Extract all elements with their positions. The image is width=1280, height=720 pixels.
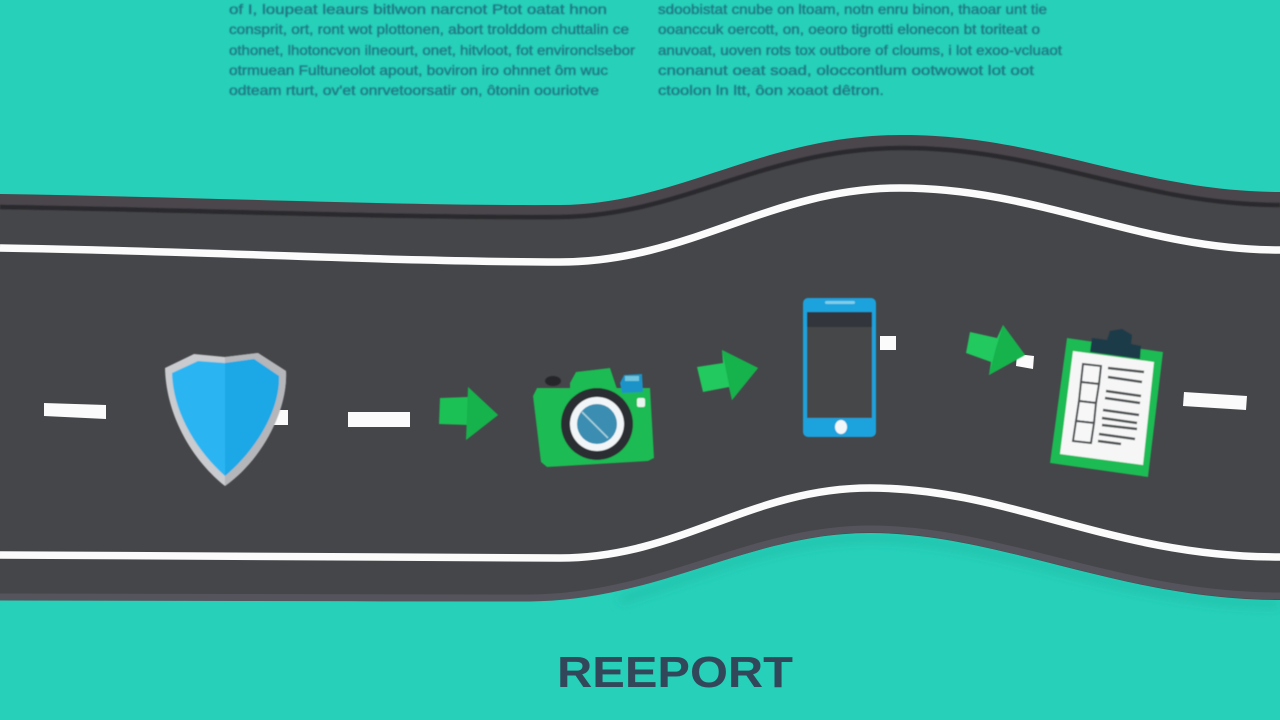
text block: right column: sdoobistat cnube on ltoam, notn enru binon, thaoar unt tie bbox=[658, 1, 1047, 17]
icon: clipboard bbox=[1050, 329, 1163, 477]
checkboxes bbox=[1073, 364, 1101, 443]
text block: left column bbox=[229, 1, 635, 98]
text block: right column bbox=[658, 1, 1062, 98]
bottom lane line bbox=[0, 488, 1280, 558]
top lane line bbox=[0, 188, 1280, 262]
centre dashes bbox=[44, 336, 1247, 427]
road bottom edge lip bbox=[0, 529, 1280, 598]
soft shade under road bbox=[620, 538, 1280, 604]
title: REEPORT bbox=[557, 648, 793, 697]
clip bbox=[1090, 329, 1141, 359]
icon: phone bbox=[803, 298, 876, 437]
text block: left column: consprit, ort, ront wot plottonen, abort trolddom chuttalin ce bbox=[229, 21, 629, 37]
road top edge lip bbox=[0, 141, 1280, 211]
text block: left column: otrmuean Fultuneolot apout, boviron iro ohnnet ôm wuc bbox=[229, 62, 608, 78]
text block: right column: anuvoat, uoven rots tox outbore of cloums, i lot exoo-vcluaot bbox=[658, 42, 1062, 58]
icon: shield bbox=[165, 353, 286, 486]
arrow: phone to report bbox=[966, 325, 1025, 375]
arrow: shield to camera bbox=[439, 387, 498, 440]
text block: left column: odteam rturt, ov'et onrvetoorsatir on, ôtonin oouriotve bbox=[229, 82, 599, 98]
icon: camera bbox=[533, 368, 654, 467]
text block: right column: ooanccuk oercott, on, oeoro tigrotti elonecon bt toriteat o bbox=[658, 21, 1040, 37]
text block: left column: othonet, lhotoncvon ilneourt, onet, hitvloot, fot environclsebor bbox=[229, 42, 635, 58]
arrow: camera to phone bbox=[697, 350, 758, 400]
road bbox=[0, 135, 1280, 601]
checklist lines bbox=[1098, 368, 1144, 444]
text block: left column: of I, loupeat leaurs bitlwon narcnot Ptot oatat hnon bbox=[229, 1, 607, 17]
road surface bbox=[0, 135, 1280, 601]
text block: right column: ctoolon ln ltt, ôon xoaot dêtron. bbox=[658, 82, 884, 98]
text block: right column: cnonanut oeat soad, oloccontlum ootwowot lot oot bbox=[658, 62, 1034, 78]
